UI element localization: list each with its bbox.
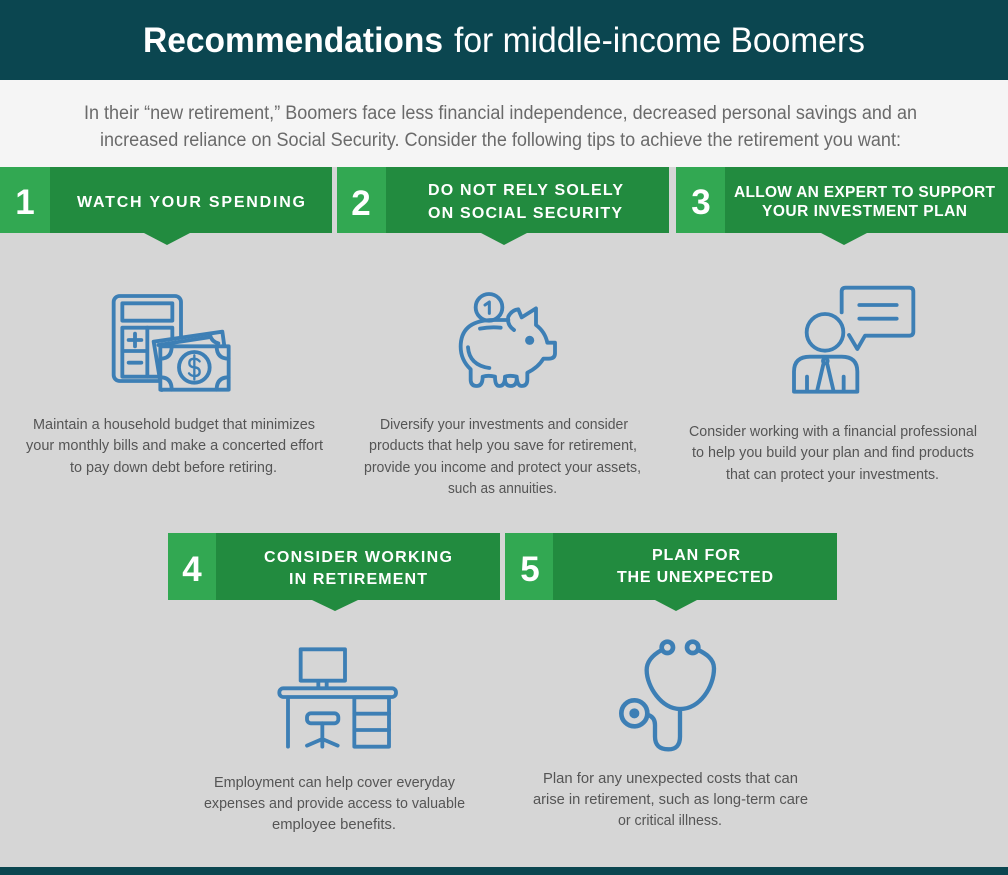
body text 3: to help you build your plan and find products: [692, 444, 974, 461]
intro text: [0, 80, 1008, 167]
body text 5: arise in retirement, such as long-term care: [533, 791, 808, 808]
heading banner 3: YOUR INVESTMENT PLAN: [762, 203, 967, 220]
body text 4: [204, 774, 465, 833]
footer bar: [0, 867, 1008, 875]
icon: adviser with speech bubble: [794, 288, 913, 392]
heading banner 4: IN RETIREMENT: [289, 571, 427, 588]
heading banner 1: 1: [15, 183, 35, 222]
body text 1: your monthly bills and make a concerted effort: [26, 437, 324, 454]
panel: tip 3 expert support: [676, 167, 1008, 483]
body text 2: such as annuities.: [448, 480, 557, 497]
body text 5: or critical illness.: [618, 812, 722, 829]
body text 3: Consider working with a financial professional: [689, 423, 977, 440]
heading banner 3: ALLOW AN EXPERT TO SUPPORT: [734, 184, 996, 201]
title banner: [0, 0, 1008, 80]
body text 1: Maintain a household budget that minimizes: [33, 416, 315, 433]
icon: piggy bank: [461, 294, 555, 386]
body text 1: [26, 416, 324, 476]
heading banner 2: ON SOCIAL SECURITY: [428, 205, 622, 222]
body text 3: that can protect your investments.: [726, 466, 939, 483]
body text 4: employee benefits.: [272, 816, 396, 833]
body text 2: Diversify your investments and consider: [380, 416, 628, 433]
heading banner 5: THE UNEXPECTED: [617, 569, 773, 586]
panel: tip 1 watch your spending: [0, 167, 332, 476]
body text 3: [689, 423, 977, 483]
panel: tip 4 working in retirement: [168, 533, 500, 833]
heading banner 2: 2: [351, 184, 371, 223]
body text 2: provide you income and protect your assets,: [364, 459, 641, 476]
icon: desk with computer: [279, 649, 396, 747]
body text 1: to pay down debt before retiring.: [70, 459, 277, 476]
heading banner 1: [0, 167, 332, 245]
heading banner 5: PLAN FOR: [652, 547, 740, 564]
heading banner 1: WATCH YOUR SPENDING: [77, 194, 305, 211]
intro text: In their “new retirement,” Boomers face less financial independence, decreased personal savings and an: [84, 103, 917, 124]
body text 2: [364, 416, 641, 497]
body text 4: Employment can help cover everyday: [214, 774, 455, 791]
title banner: for middle-income Boomers: [454, 21, 865, 60]
heading banner 2: DO NOT RELY SOLELY: [428, 182, 623, 199]
body text 4: expenses and provide access to valuable: [204, 795, 465, 812]
heading banner 4: 4: [182, 550, 202, 589]
heading banner 3: [676, 167, 1008, 245]
title banner: Recommendations: [143, 21, 443, 60]
body text 2: products that help you save for retirement,: [369, 437, 637, 454]
body text 5: Plan for any unexpected costs that can: [543, 770, 798, 787]
heading banner 5: [505, 533, 837, 611]
heading banner 2: [337, 167, 669, 245]
icon: stethoscope: [621, 642, 714, 749]
panel: tip 5 plan for the unexpected: [505, 533, 837, 829]
heading banner 4: CONSIDER WORKING: [264, 549, 452, 566]
icon: calculator and money: [114, 296, 229, 390]
panel: tip 2 social security: [337, 167, 669, 497]
heading banner 4: [168, 533, 500, 611]
intro text: increased reliance on Social Security. Consider the following tips to achieve the retirement you want:: [100, 130, 901, 151]
heading banner 5: 5: [520, 550, 540, 589]
heading banner 3: 3: [691, 183, 711, 222]
body text 5: [533, 770, 808, 829]
